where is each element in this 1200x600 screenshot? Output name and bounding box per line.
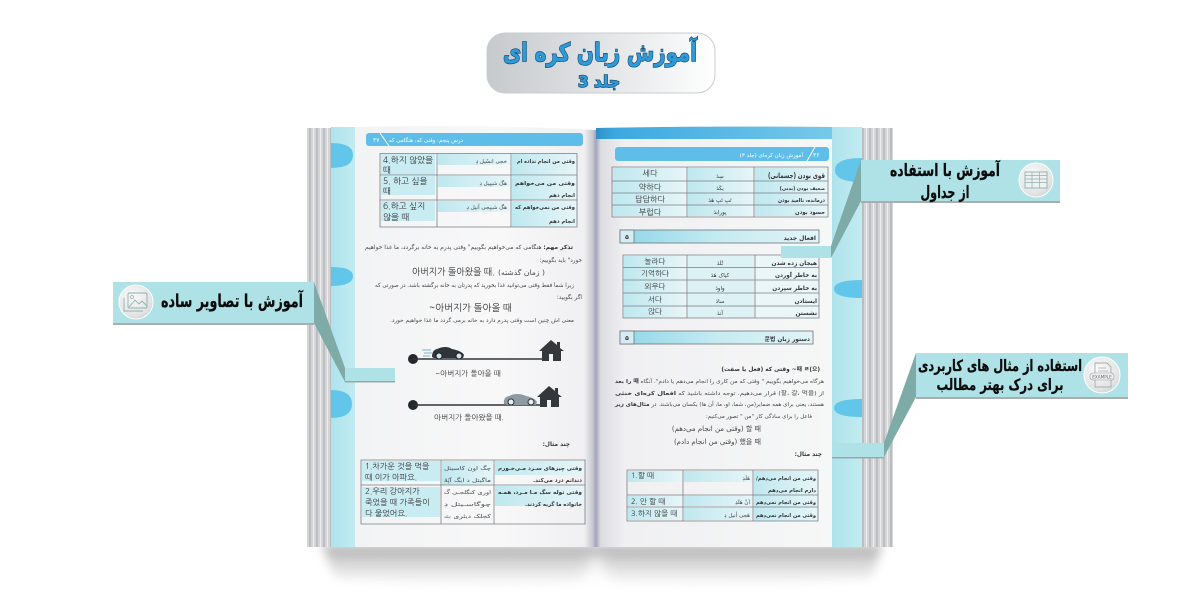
- timeline: car arrived at house: 아버지가 돌아왔을 때.: [434, 413, 504, 422]
- grammar table: هَجی أنیل دِ: [724, 511, 750, 519]
- right page header bar: ۳۶: [813, 152, 819, 159]
- vocabulary table 2: هیجان زده شدن: [772, 261, 817, 267]
- vocabulary table 2: 서다: [648, 295, 662, 304]
- left table: verb forms: وقتی من نمی‌خواهم که: [515, 204, 576, 211]
- korean present form: ~아버지가 돌아올 때: [429, 303, 512, 313]
- icon: pictures: [119, 285, 153, 319]
- icon: parked car: [504, 394, 537, 405]
- vocabulary table 1: سِدَ: [716, 174, 724, 180]
- vocabulary table 2: کیاک هَدَ: [710, 272, 730, 279]
- left table: examples: وقتی توله سگ مـا مـرد، همـه: [498, 488, 583, 496]
- note paragraph: تذکر مهم: هنگامی که می‌خواهیم بگوییم" وقتی پدرم به خانه برگردد، ما غذا خواهیم: [365, 243, 573, 251]
- vocabulary table 2: آندَ: [717, 310, 723, 317]
- left table: examples: چگ اون کاسیتل: [444, 465, 491, 472]
- vocabulary table 2: واودَ: [715, 286, 725, 292]
- left table: examples: 1.차가운 것을 먹을: [365, 462, 430, 471]
- left table: verb forms: [380, 154, 577, 227]
- left table: verb forms: 때: [383, 186, 391, 196]
- left table: examples: ماگیتل د ایگ آپُهْ: [444, 477, 491, 484]
- icon: example document: [1084, 357, 1120, 393]
- callout: practical examples: [832, 353, 1128, 458]
- timeline: car approaching house: [408, 340, 564, 378]
- title pill: [487, 33, 715, 93]
- section bar: grammar: [620, 331, 813, 344]
- korean past form: ( زمان گذشته): [498, 268, 545, 277]
- left page header bar: ۳۷: [373, 137, 380, 144]
- left page content: [361, 133, 585, 524]
- left table: verb forms: انجام دهم: [549, 219, 575, 225]
- grammar paragraph: [614, 377, 825, 420]
- korean past form: 아버지가 돌아왔을 때.: [412, 267, 495, 277]
- left table: verb forms: 4.하지 않았을: [383, 155, 433, 165]
- left table: examples: وقتی چیزهای سـرد مـی‌خـورم: [498, 466, 583, 472]
- callout: tables: آموزش با استفاده: [890, 159, 1001, 181]
- title text: [503, 37, 698, 91]
- left table: verb forms: خجی انسْیل دِ: [476, 159, 507, 165]
- left table: verb forms: وقتی من انجام نداده ام: [517, 159, 576, 165]
- grammar paragraph: از (할، 갈، 먹을) قرار می‌دهیم. توجه داشته باشید که افعال کره‌ای خنثی: [615, 389, 825, 397]
- left table: examples: کجلک دیثری تَ: [444, 513, 492, 520]
- grammar paragraph: هستند، یعنی برای همه ضمایر(من، شما، او، ما، آن ها) یکسان می‌باشند. در مثال‌های زیر: [614, 401, 824, 408]
- vocabulary table 1: قوی بودن (جسمانی): [768, 171, 825, 180]
- vocabulary table 1: درمانده، ناامید بودن: [778, 198, 825, 204]
- left table: examples: 때 이가 아파요.: [365, 473, 417, 482]
- explanation paragraph: زیرا شما فقط وقتی می‌توانید غذا بخورید که پدرتان به خانه برگشته باشد. در صورتی که: [375, 281, 574, 289]
- grammar table: اَنْ هَلَدِ: [735, 499, 751, 506]
- callout: simple images: [113, 282, 395, 382]
- left table: verb forms: هگ شیپیل دِ: [479, 180, 507, 187]
- grammar table: 2. 안 할 때: [631, 497, 665, 506]
- left table: verb forms: 6.하고 싶지: [383, 201, 425, 211]
- callout: practical examples: برای درک بهتر مطالب: [936, 376, 1064, 394]
- vocabulary table 1: 부럽다: [639, 208, 662, 217]
- section bar: new verbs: افعال جدید: [784, 235, 816, 242]
- callout: tables: [781, 159, 1060, 258]
- vocabulary table 2: 앉다: [648, 307, 662, 316]
- vocabulary table 1: 약하다: [639, 183, 662, 192]
- grammar table: [627, 470, 818, 521]
- left table: verb forms: 않을 때: [383, 212, 409, 222]
- callout: simple images: آموزش با تصاویر ساده: [161, 289, 304, 312]
- vocabulary table 2: به خاطر آوردن: [775, 271, 817, 279]
- korean verb forms: [672, 424, 761, 446]
- left table: examples: دندانم درد می‌کند.: [533, 477, 582, 484]
- meaning sentence: معنی اش چنین است وقتی پدرم دارد به خانه برمی گردد ما غذا خواهیم خورد.: [390, 317, 574, 324]
- vocabulary table 1: 세다: [642, 169, 658, 178]
- vocabulary table 1: پورابدَ: [713, 210, 727, 216]
- left table: verb forms: وقتی من می‌خواهم: [515, 181, 576, 187]
- grammar table: 3.하지 않을 때: [631, 509, 677, 518]
- grammar table: 1.할 때: [631, 471, 654, 480]
- right page header bar: آموزش زبان کره‌ای (جلد ۳): [740, 152, 803, 159]
- section bar: new verbs: [620, 230, 819, 243]
- vocabulary table 2: نشستن: [795, 311, 817, 317]
- vocabulary table 1: 답답하다: [635, 195, 666, 204]
- left page header bar: درس پنجم: وقتی که، هنگامی که: [389, 137, 464, 144]
- grammar paragraph: هرگاه می‌خواهیم بگوییم " وقتی که من کاری را انجام می‌دهم یا دادم". آنگاه 때 را بعد: [615, 377, 824, 385]
- explanation paragraph: [375, 281, 582, 301]
- examples heading left: چند مثال:: [543, 442, 570, 448]
- title text: آموزش زبان کره ای: [503, 37, 698, 68]
- korean past form: [412, 267, 545, 277]
- left table: examples: 죽었을 때 가족들이: [365, 498, 430, 507]
- vocabulary table 2: 외우다: [644, 282, 666, 291]
- left table: examples: [361, 460, 585, 524]
- left table: verb forms: 5. 하고 싶을: [383, 176, 427, 186]
- section bar: new verbs: ۵: [625, 234, 629, 241]
- section bar: grammar: ۵: [625, 335, 629, 342]
- right page header bar: [615, 147, 829, 161]
- open book: [307, 126, 893, 547]
- vocabulary table 1: ضعیف بودن (بدنی): [780, 186, 825, 192]
- grammar table: وقتی من انجام نمی‌دهم: [756, 513, 816, 519]
- left page header bar: [366, 133, 583, 146]
- vocabulary table 2: سادَ: [715, 299, 725, 305]
- vocabulary table 2: نُلَدَ: [717, 260, 724, 267]
- left table: examples: اوری کنگلجـی گ: [444, 488, 491, 496]
- left table: examples: چوگاسـیتل دِ: [444, 501, 491, 508]
- vocabulary table 1: تَپ تَپ هَدَ: [708, 198, 732, 204]
- grammar table: وقتی من انجام می‌دهم/: [756, 476, 816, 482]
- vocabulary table 1: حسود بودن: [795, 210, 825, 216]
- timeline: car arrived at house: [408, 386, 562, 422]
- icon: example document: EXAMPLE: [1092, 374, 1112, 380]
- vocabulary table 2: 기억하다: [641, 269, 669, 278]
- grammar table: دارم انجام می‌دهم: [768, 488, 816, 494]
- right page content: [612, 147, 829, 521]
- vocabulary table 2: به خاطر سپردن: [772, 286, 817, 292]
- timeline: car approaching house: ~아버지가 돌아올 때: [435, 369, 501, 378]
- left table: verb forms: 때: [383, 165, 391, 175]
- icon: table: [1019, 163, 1053, 197]
- note paragraph: [365, 243, 582, 264]
- vocabulary table 1: یکَدَ: [716, 185, 724, 192]
- grammar table: هَلَدِ: [742, 475, 750, 482]
- book shadow: [322, 545, 882, 600]
- title text: جلد 3: [578, 72, 620, 91]
- icon: moving car: [422, 347, 464, 359]
- note paragraph: خورد" باید بگوییم:: [539, 256, 582, 264]
- korean verb forms: 할 때 (وقتی من انجام می‌دهم): [672, 424, 761, 433]
- korean verb forms: 했을 때 (وقتی من انجام دادم): [674, 437, 761, 446]
- grammar heading: 때 ㄹ(으)~ وقتی که (فعل یا صفت): [721, 365, 820, 373]
- grammar table: وقتی من انجام نمی‌دهم: [756, 500, 816, 506]
- callout: practical examples: استفاده از مثال های کاربردی: [918, 357, 1082, 375]
- left table: verb forms: انجام دهم: [549, 193, 575, 199]
- callout: tables: از جداول: [920, 183, 970, 203]
- examples heading right: چند مثال:: [795, 452, 822, 458]
- icon: arrival house: [537, 386, 562, 407]
- left table: examples: 2.우리 강아지가: [365, 487, 420, 496]
- section bar: grammar: دستور زبان 문법: [765, 335, 810, 343]
- grammar paragraph: فاعل را برای سادگی کار "من " تصور می‌کنیم:: [706, 413, 812, 420]
- left page block: [307, 126, 596, 547]
- right page block: [596, 126, 893, 547]
- icon: house: [539, 340, 564, 361]
- left table: verb forms: هگ شیپجی أنیل دِ: [466, 203, 507, 211]
- left table: examples: خانواده ما گریه کردند.: [525, 501, 582, 508]
- left table: examples: 다 울었어요.: [365, 509, 407, 518]
- vocabulary table 1: [612, 167, 828, 217]
- explanation paragraph: اگر بگویید:: [557, 293, 582, 301]
- vocabulary table 2: [623, 255, 819, 318]
- vocabulary table 2: ایستادن: [794, 299, 817, 305]
- vocabulary table 2: 놀라다: [644, 257, 666, 266]
